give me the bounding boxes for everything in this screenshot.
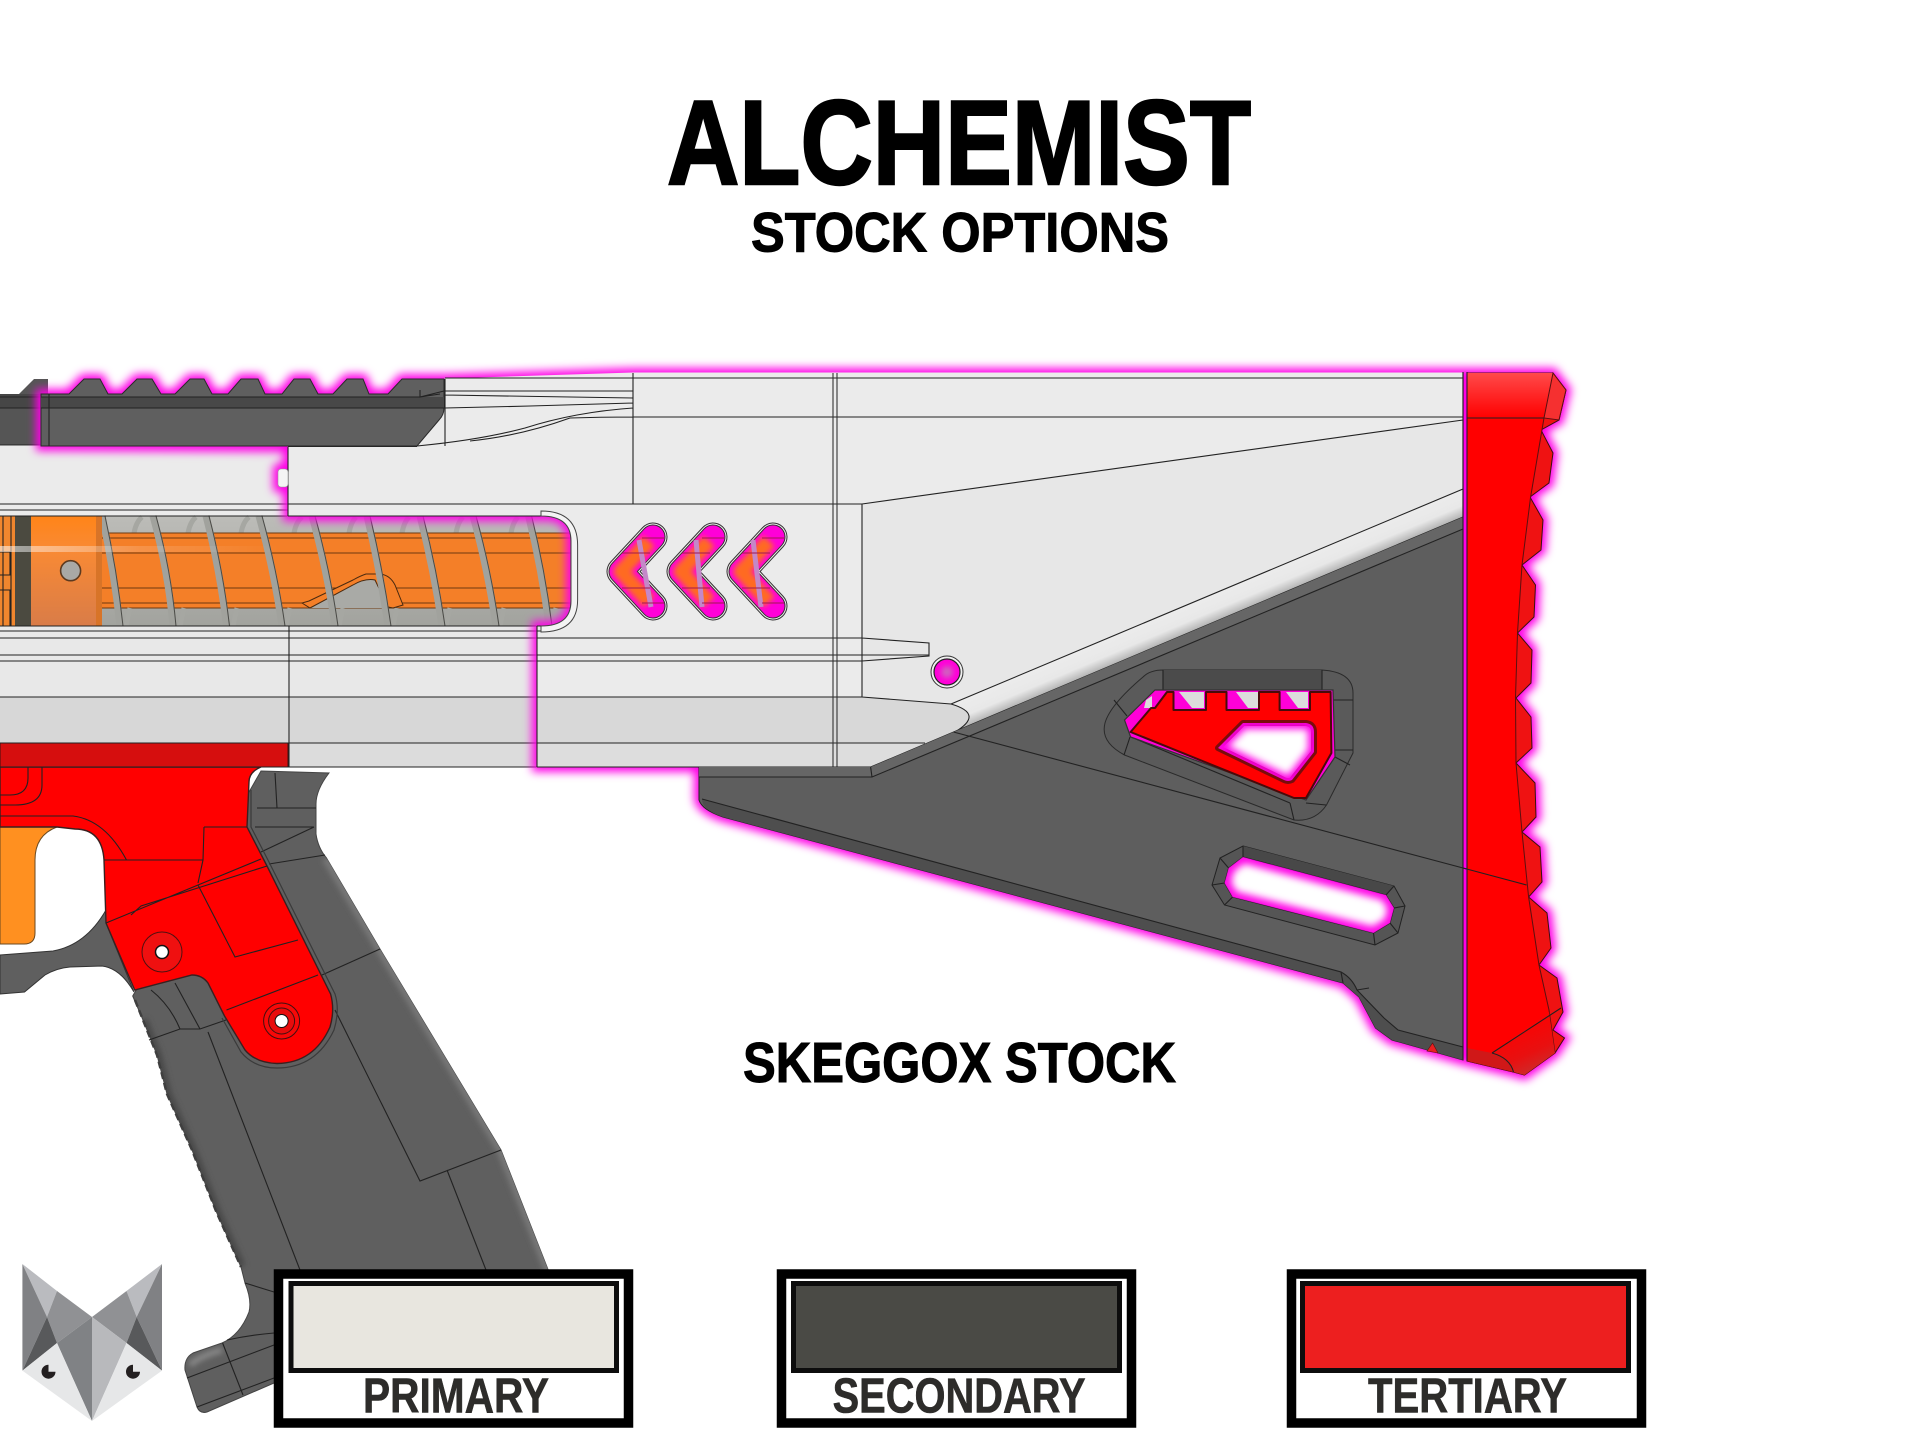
logo: fox head — [22, 1264, 162, 1421]
stock tube (primary colour) — [278, 372, 1463, 767]
skeleton stock (secondary colour) — [699, 517, 1526, 1060]
stock window with red insert — [1104, 670, 1353, 820]
chevron cut-outs — [621, 537, 784, 607]
spring window with orange plunger — [0, 516, 582, 626]
pistol grip — [133, 771, 570, 1412]
chevron 1 — [621, 537, 664, 607]
subtitle: STOCK OPTIONS — [751, 200, 1169, 264]
trigger — [0, 827, 57, 944]
grip rim around red frame — [222, 790, 337, 1068]
option label: SKEGGOX STOCK — [743, 1031, 1176, 1095]
rail — [41, 379, 444, 446]
receiver body (left section) — [0, 446, 540, 767]
title: ALCHEMIST — [667, 76, 1251, 210]
legend: primary — [278, 1274, 628, 1424]
legend: tertiary — [1292, 1274, 1642, 1424]
left rail segment — [0, 379, 48, 445]
lower slot — [1212, 846, 1405, 945]
red grip frame — [0, 767, 333, 1064]
legend: tertiary: TERTIARY — [1368, 1370, 1567, 1424]
chevron 2 — [681, 537, 724, 607]
chevron 3 — [741, 537, 784, 607]
legend: secondary — [782, 1274, 1132, 1424]
infographic canvas — [0, 98, 1646, 1428]
legend: secondary: SECONDARY — [833, 1370, 1086, 1424]
magenta pin hole — [931, 656, 963, 688]
butt plate (tertiary colour) — [1427, 372, 1566, 1075]
legend: primary: PRIMARY — [363, 1370, 549, 1424]
magenta highlight glow around stock — [41, 373, 1566, 1075]
trigger guard — [0, 910, 134, 994]
